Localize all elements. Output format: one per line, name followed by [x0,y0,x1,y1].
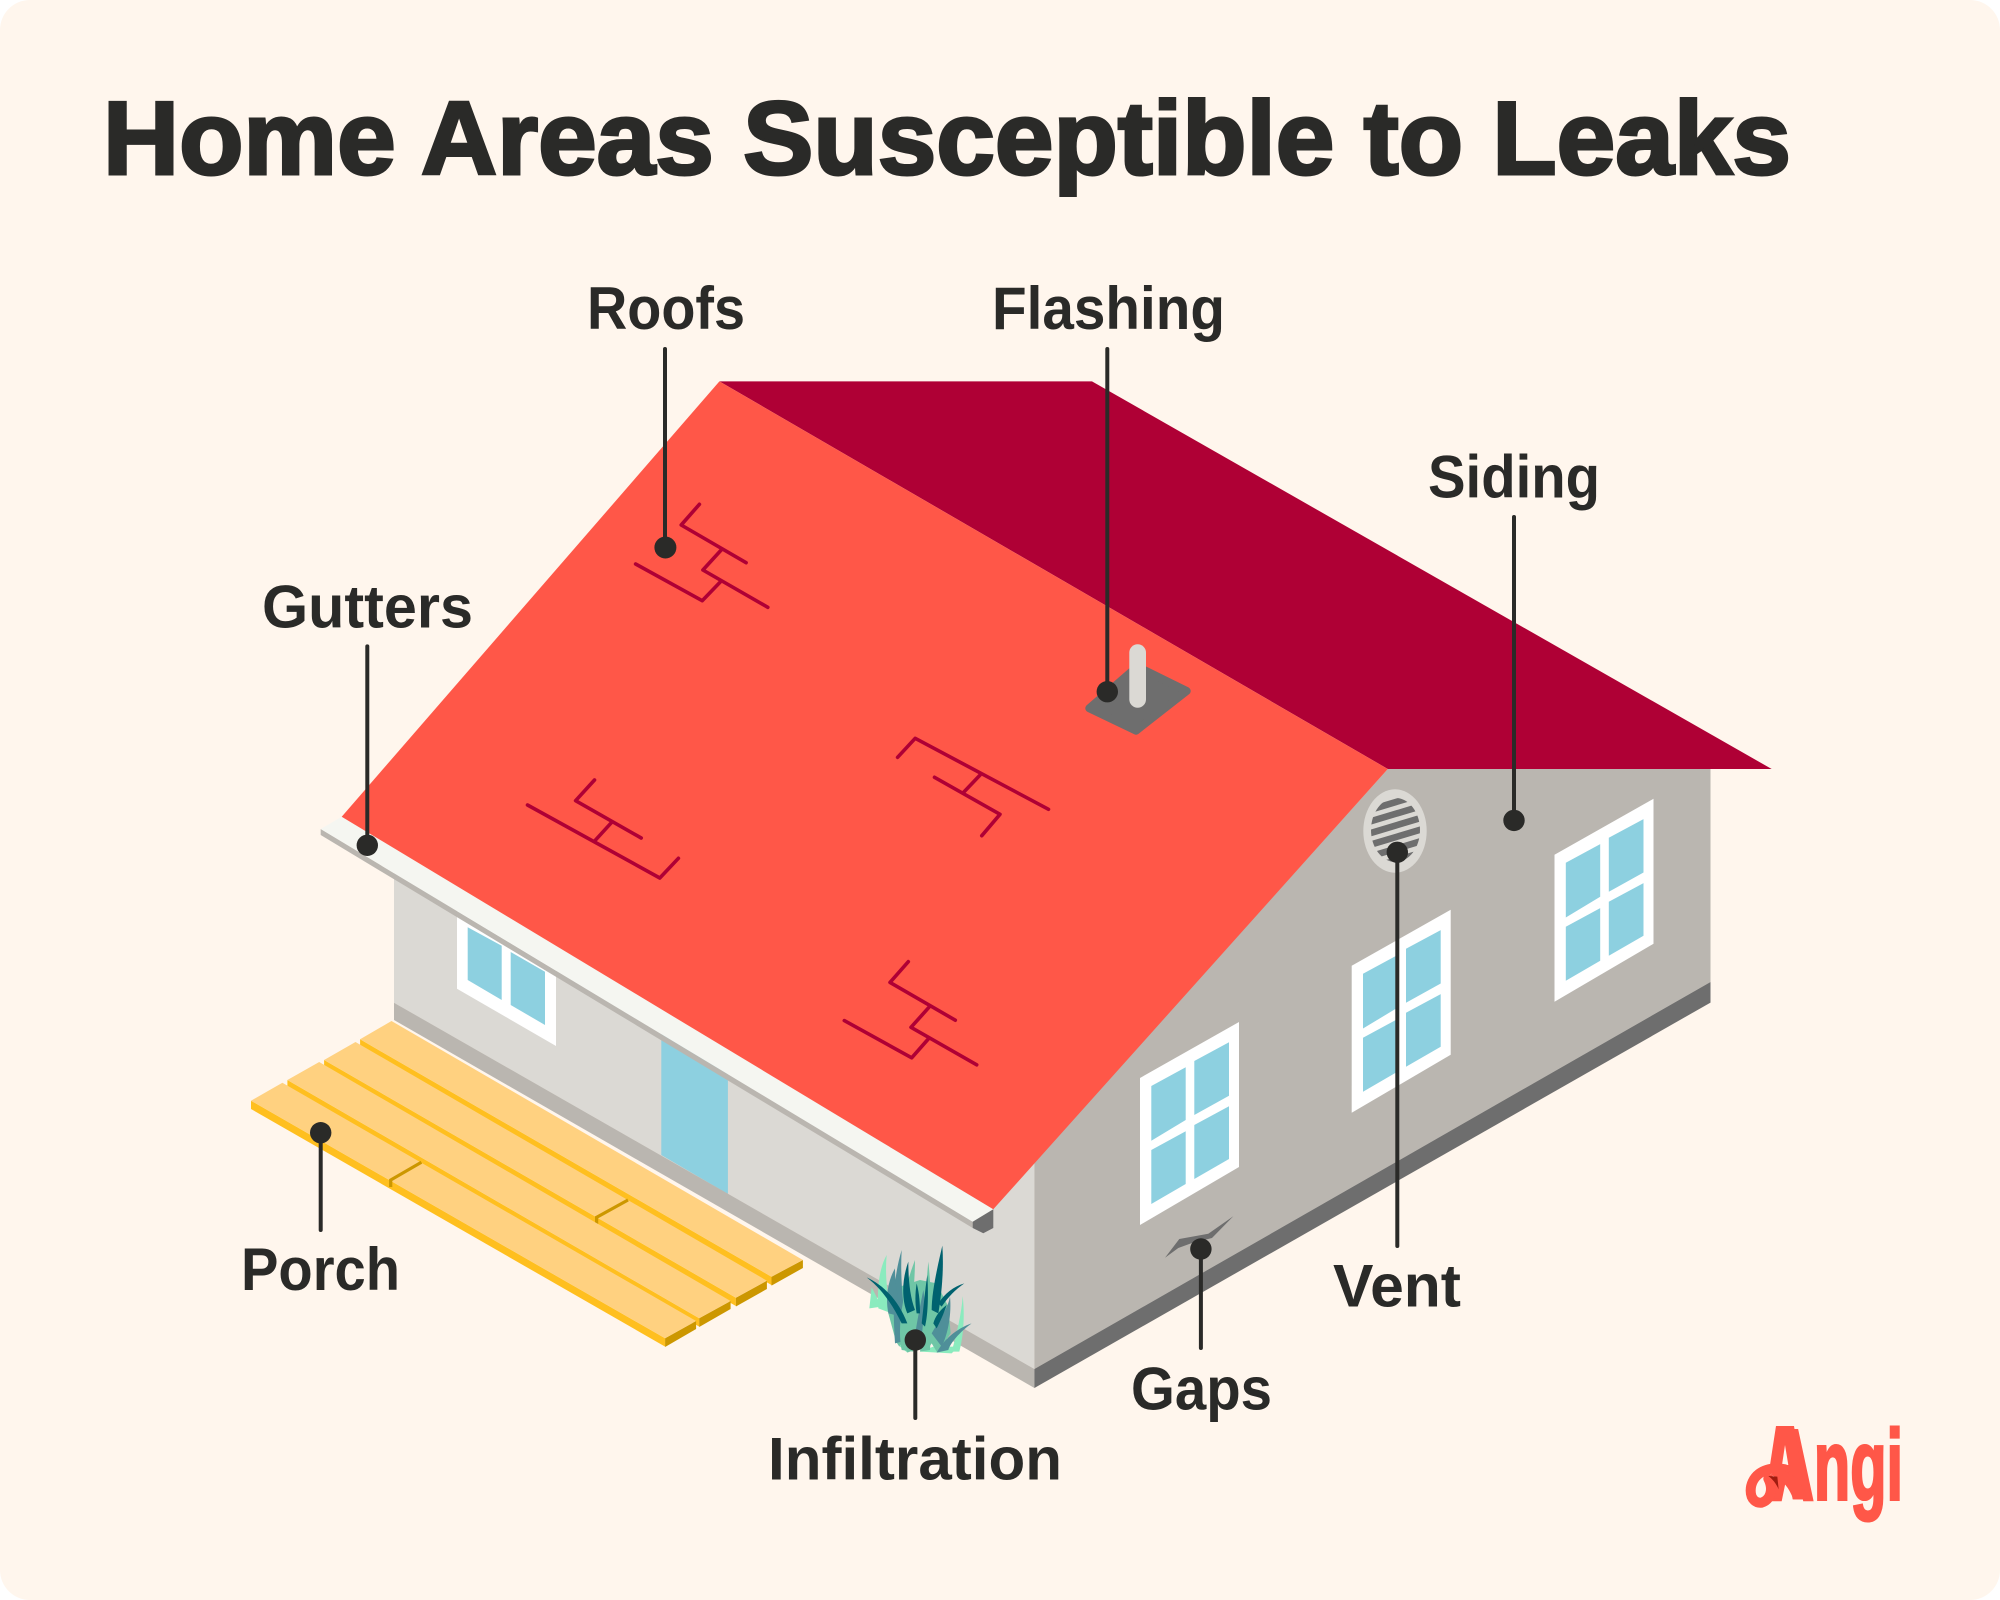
callout: Gutters [262,574,473,856]
wall gap crack [1165,1216,1233,1258]
roof crack top [636,504,768,607]
roof crack right [898,738,1048,836]
title: Home Areas Susceptible to Leaks [103,81,1791,197]
callout: Roofs: Roofs [587,275,745,342]
roof back slope [719,381,1772,769]
callout: Gaps [1131,1238,1272,1423]
callout: Flashing: Flashing [992,275,1225,342]
front foundation [394,1003,1034,1388]
roof front slope [342,381,1388,1209]
callout: Gutters: Gutters [262,574,473,640]
callout: Roofs [587,275,745,558]
callout: Infiltration: Infiltration [768,1426,1062,1493]
front wall window [457,900,556,1046]
plank 1 [251,1083,696,1347]
plank 2 [287,1062,731,1327]
callout: Vent: Vent [1333,1253,1461,1320]
front door [661,1030,728,1194]
plank 3 [324,1042,767,1306]
callout: Gaps: Gaps [1131,1356,1272,1423]
grass infiltration [867,1246,972,1353]
logo: Angi: Angi [1771,1409,1903,1521]
side window 3 [1554,799,1654,1002]
roof crack left [528,780,678,878]
side window 2 [1352,910,1451,1113]
callout: Porch [241,1122,400,1303]
callout: Flashing [992,275,1225,702]
callout: Vent [1333,842,1461,1320]
flashing plate and pipe [1089,644,1187,731]
side wall [1034,769,1710,1369]
house illustration [321,381,1772,1388]
side foundation [1034,982,1710,1388]
side window 1 [1140,1022,1239,1225]
porch planks [251,1021,803,1347]
front wall [394,870,1034,1369]
gable vent [1363,789,1427,873]
logo: Angi [1751,1409,1903,1521]
callout: Siding: Siding [1428,443,1600,510]
roof crack bottom [844,962,977,1065]
gutter [321,817,993,1233]
callout: Infiltration [768,1329,1062,1493]
callout: Porch: Porch [241,1236,400,1303]
plank 4 [360,1021,803,1286]
callout: Siding [1428,443,1600,831]
